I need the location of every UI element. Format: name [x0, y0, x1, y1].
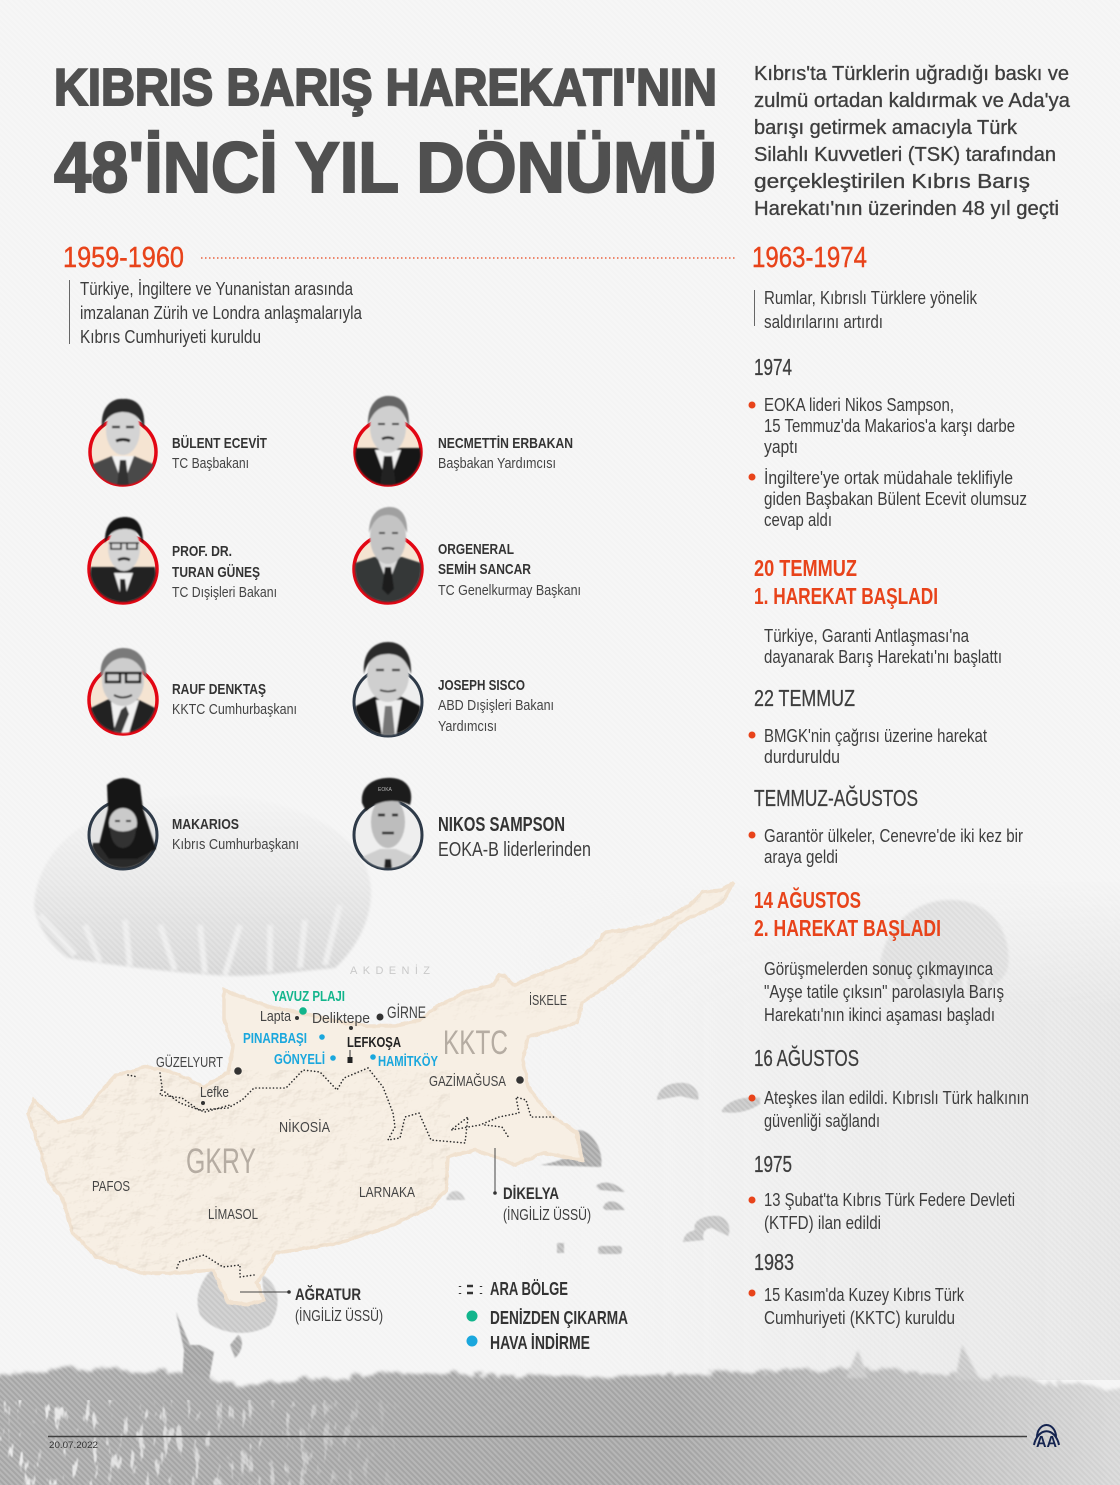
title — [54, 59, 717, 208]
place names and markers: NİKOSİA — [279, 1118, 330, 1136]
place names and markers: Lefke — [200, 1084, 229, 1101]
intro text — [754, 63, 1071, 220]
label: Nikos Sampson: NIKOS SAMPSON — [438, 814, 565, 836]
portrait: Nikos Sampson: EOKA — [378, 787, 393, 793]
text block: attacks increased: Rumlar, Kıbrıslı Türklere yönelik — [764, 288, 978, 308]
entry: 16 Ağustos: güvenliği sağlandı — [764, 1111, 880, 1131]
label: Rauf Denktaş: KKTC Cumhurbaşkanı — [172, 702, 297, 718]
place names and markers — [92, 989, 567, 1223]
timeline column — [748, 242, 1029, 1328]
label: Bülent Ecevit: BÜLENT ECEVİT — [172, 435, 267, 452]
portrait: Turan Güneş — [87, 517, 159, 603]
entry: 16 Ağustos: 16 AĞUSTOS — [754, 1045, 859, 1071]
entry: 1983: 15 Kasım'da Kuzey Kıbrıs Türk — [764, 1285, 965, 1305]
intro text: gerçekleştirilen Kıbrıs Barış — [754, 171, 1030, 193]
map legend — [460, 1279, 628, 1353]
place names and markers: YAVUZ PLAJI — [272, 989, 345, 1005]
text block: republic founded: Türkiye, İngiltere ve Yunanistan arasında — [80, 279, 354, 299]
region label: GKRY: GKRY — [186, 1142, 256, 1181]
label: Makarios: Kıbrıs Cumhurbaşkanı — [172, 837, 299, 853]
text block: republic founded: imzalanan Zürih ve Londra anlaşmalarıyla — [80, 303, 363, 323]
place names and markers: GAZİMAĞUSA — [429, 1072, 506, 1090]
background photo: paratroopers and ground — [0, 795, 1120, 1485]
entry: 1974: 15 Temmuz'da Makarios'a karşı darbe — [764, 416, 1015, 436]
entry: 16 Ağustos — [748, 1045, 1029, 1131]
text block: republic founded — [80, 279, 363, 347]
callout: Ağratur base — [240, 1285, 383, 1325]
place names and markers: GÜZELYURT — [156, 1053, 223, 1071]
label: Nikos Sampson — [438, 814, 591, 861]
terrain shading — [30, 890, 740, 1270]
label: Turan Güneş: TURAN GÜNEŞ — [172, 564, 260, 581]
label: Akdeniz: AKDENİZ — [350, 964, 430, 977]
text block: attacks increased: saldırılarını artırdı — [764, 312, 883, 332]
text block: republic founded: Kıbrıs Cumhuriyeti kuruldu — [80, 327, 261, 347]
entry: 1974: İngiltere'ye ortak müdahale teklifiyle — [764, 468, 1013, 488]
label: Semih Sancar — [438, 541, 581, 599]
legend: airborne landing: HAVA İNDİRME — [490, 1333, 590, 1353]
island shape — [28, 882, 734, 1305]
label: Necmettin Erbakan: NECMETTİN ERBAKAN — [438, 435, 573, 452]
entry: 1975 — [748, 1151, 1015, 1233]
entry: 1975: (KTFD) ilan edildi — [764, 1213, 881, 1233]
small distant parachutes — [446, 1083, 760, 1254]
map of Cyprus — [28, 882, 740, 1325]
right parachute — [880, 900, 1008, 998]
entry: 1974: giden Başbakan Bülent Ecevit olumsuz — [764, 489, 1027, 509]
callout: Ağratur base: AĞRATUR — [295, 1285, 361, 1304]
label: Joseph Sisco: Yardımcısı — [438, 719, 497, 735]
entry: 1983 — [748, 1249, 965, 1328]
entry: Temmuz-Ağustos: TEMMUZ-AĞUSTOS — [754, 785, 918, 811]
intro text: Harekatı'nın üzerinden 48 yıl geçti — [754, 198, 1059, 220]
label: Makarios — [172, 816, 299, 853]
place names and markers: Deliktepe — [312, 1010, 370, 1027]
place names and markers: GİRNE — [387, 1003, 426, 1022]
label: Makarios: MAKARIOS — [172, 816, 239, 833]
intro text: Silahlı Kuvvetleri (TSK) tarafından — [754, 144, 1056, 166]
ground — [0, 1345, 1120, 1485]
buffer zone line — [128, 1068, 555, 1277]
place names and markers: İSKELE — [529, 991, 567, 1009]
entry: 22 Temmuz: durduruldu — [764, 747, 840, 767]
entry: 1974 — [748, 354, 1027, 530]
entry: 14 Ağustos: Görüşmelerden sonuç çıkmayınca — [764, 959, 994, 979]
heading: 1963-1974: 1963-1974 — [752, 242, 867, 274]
callout: Ağratur base: (İNGİLİZ ÜSSÜ) — [295, 1306, 383, 1325]
intro text: zulmü ortadan kaldırmak ve Ada'ya — [754, 90, 1071, 112]
label: Semih Sancar: SEMİH SANCAR — [438, 561, 531, 578]
label: Bülent Ecevit — [172, 435, 267, 472]
region label: KKTC: KKTC — [443, 1024, 508, 1062]
footer — [48, 1425, 1059, 1451]
place names and markers: PINARBAŞI — [243, 1031, 307, 1047]
entry: 14 Ağustos: Harekatı'nın ikinci aşaması başladı — [764, 1005, 995, 1025]
entry: 22 Temmuz: BMGK'nin çağrısı üzerine harekat — [764, 726, 987, 746]
entry: Temmuz-Ağustos — [748, 785, 1023, 867]
entry: 14 Ağustos: "Ayşe tatile çıksın" parolasıyla Barış — [764, 982, 1004, 1002]
entry: 1983: Cumhuriyeti (KKTC) kuruldu — [764, 1308, 955, 1328]
entry: 20 Temmuz: dayanarak Barış Harekatı'nı başlattı — [764, 647, 1002, 667]
portrait: Necmettin Erbakan — [352, 396, 424, 486]
callout: Dikelya base: (İNGİLİZ ÜSSÜ) — [503, 1205, 591, 1224]
label: Rauf Denktaş: RAUF DENKTAŞ — [172, 681, 266, 698]
entry: 1974: 1974 — [754, 354, 792, 380]
label: Turan Güneş — [172, 543, 277, 601]
callout: Dikelya base: DİKELYA — [503, 1184, 559, 1203]
label: Joseph Sisco: ABD Dışişleri Bakanı — [438, 698, 554, 714]
label: Semih Sancar: ORGENERAL — [438, 541, 514, 558]
legend: sea landing: DENİZDEN ÇIKARMA — [490, 1308, 628, 1328]
label: Rauf Denktaş — [172, 681, 297, 718]
entry: 1974: yaptı — [764, 437, 798, 457]
legend: buffer zone: ARA BÖLGE — [490, 1279, 568, 1299]
entry: 20 Temmuz: Türkiye, Garanti Antlaşması'na — [764, 626, 970, 646]
entry: 14 Ağustos — [754, 886, 1004, 1025]
entry: 20 Temmuz: 1. HAREKAT BAŞLADI — [754, 583, 938, 609]
place names and markers: LEFKOŞA — [347, 1034, 401, 1051]
callout: Dikelya base — [493, 1148, 591, 1224]
entry: 1983: 1983 — [754, 1249, 794, 1275]
label: Joseph Sisco — [438, 677, 554, 735]
place names and markers: LARNAKA — [359, 1184, 415, 1201]
entry: 1975: 1975 — [754, 1151, 792, 1177]
heading: 1959-1960: 1959-1960 — [63, 242, 184, 274]
label: Necmettin Erbakan: Başbakan Yardımcısı — [438, 456, 556, 472]
section 1959-1960 — [63, 242, 735, 347]
label: Joseph Sisco: JOSEPH SISCO — [438, 677, 525, 694]
large parachute — [34, 795, 371, 976]
entry: 22 Temmuz: 22 TEMMUZ — [754, 685, 855, 711]
date: 20.07.2022 — [49, 1440, 98, 1451]
label: Necmettin Erbakan — [438, 435, 573, 472]
place names and markers: GÖNYELİ — [274, 1051, 325, 1068]
portrait: Joseph Sisco — [352, 642, 424, 736]
label: Semih Sancar: TC Genelkurmay Başkanı — [438, 583, 581, 599]
entry: 20 Temmuz: 20 TEMMUZ — [754, 555, 857, 581]
portrait: Bülent Ecevit — [87, 399, 159, 486]
portrait: Rauf Denktaş — [87, 648, 159, 734]
parachutist bottom left — [176, 1267, 278, 1385]
intro text: barışı getirmek amacıyla Türk — [754, 117, 1018, 139]
title: 48'İNCİ YIL DÖNÜMÜ — [54, 129, 717, 208]
legend: buffer zone — [460, 1279, 568, 1299]
entry: 1975: 13 Şubat'ta Kıbrıs Türk Federe Devleti — [764, 1190, 1015, 1210]
text block: attacks increased — [764, 288, 978, 332]
entry: 1974: EOKA lideri Nikos Sampson, — [764, 395, 954, 415]
entry: Temmuz-Ağustos: araya geldi — [764, 847, 838, 867]
entry: 14 Ağustos: 14 AĞUSTOS — [754, 886, 861, 913]
entry: 1974: cevap aldı — [764, 510, 832, 530]
place names and markers: LİMASOL — [208, 1205, 258, 1223]
label: Turan Güneş: TC Dışişleri Bakanı — [172, 585, 277, 601]
label: Nikos Sampson: EOKA-B liderlerinden — [438, 839, 591, 861]
title: KIBRIS BARIŞ HAREKATI'NIN — [54, 59, 717, 117]
portrait: Semih Sancar — [352, 507, 424, 603]
legend: airborne landing — [466, 1333, 590, 1353]
place names and markers: HAMİTKÖY — [378, 1053, 438, 1070]
legend: sea landing — [466, 1308, 628, 1328]
entry: Temmuz-Ağustos: Garantör ülkeler, Cenevre'de iki kez bir — [764, 826, 1023, 846]
intro text: Kıbrıs'ta Türklerin uğradığı baskı ve — [754, 63, 1069, 85]
entry: 16 Ağustos: Ateşkes ilan edildi. Kıbrıslı Türk halkının — [764, 1088, 1029, 1108]
place names and markers: Lapta — [260, 1008, 292, 1025]
panel: portraits — [87, 396, 424, 869]
place names and markers: PAFOS — [92, 1178, 130, 1195]
entry: 20 Temmuz — [754, 555, 1002, 667]
entry: 22 Temmuz — [748, 685, 987, 767]
icon: AA logo — [1034, 1425, 1059, 1451]
label: Turan Güneş: PROF. DR. — [172, 543, 232, 560]
entry: 14 Ağustos: 2. HAREKAT BAŞLADI — [754, 915, 941, 941]
panel: names and roles — [172, 435, 591, 861]
portrait: Makarios — [87, 778, 159, 869]
icon: AA logo: AA — [1036, 1434, 1057, 1451]
label: Bülent Ecevit: TC Başbakanı — [172, 456, 249, 472]
portrait: Nikos Sampson — [352, 778, 424, 869]
